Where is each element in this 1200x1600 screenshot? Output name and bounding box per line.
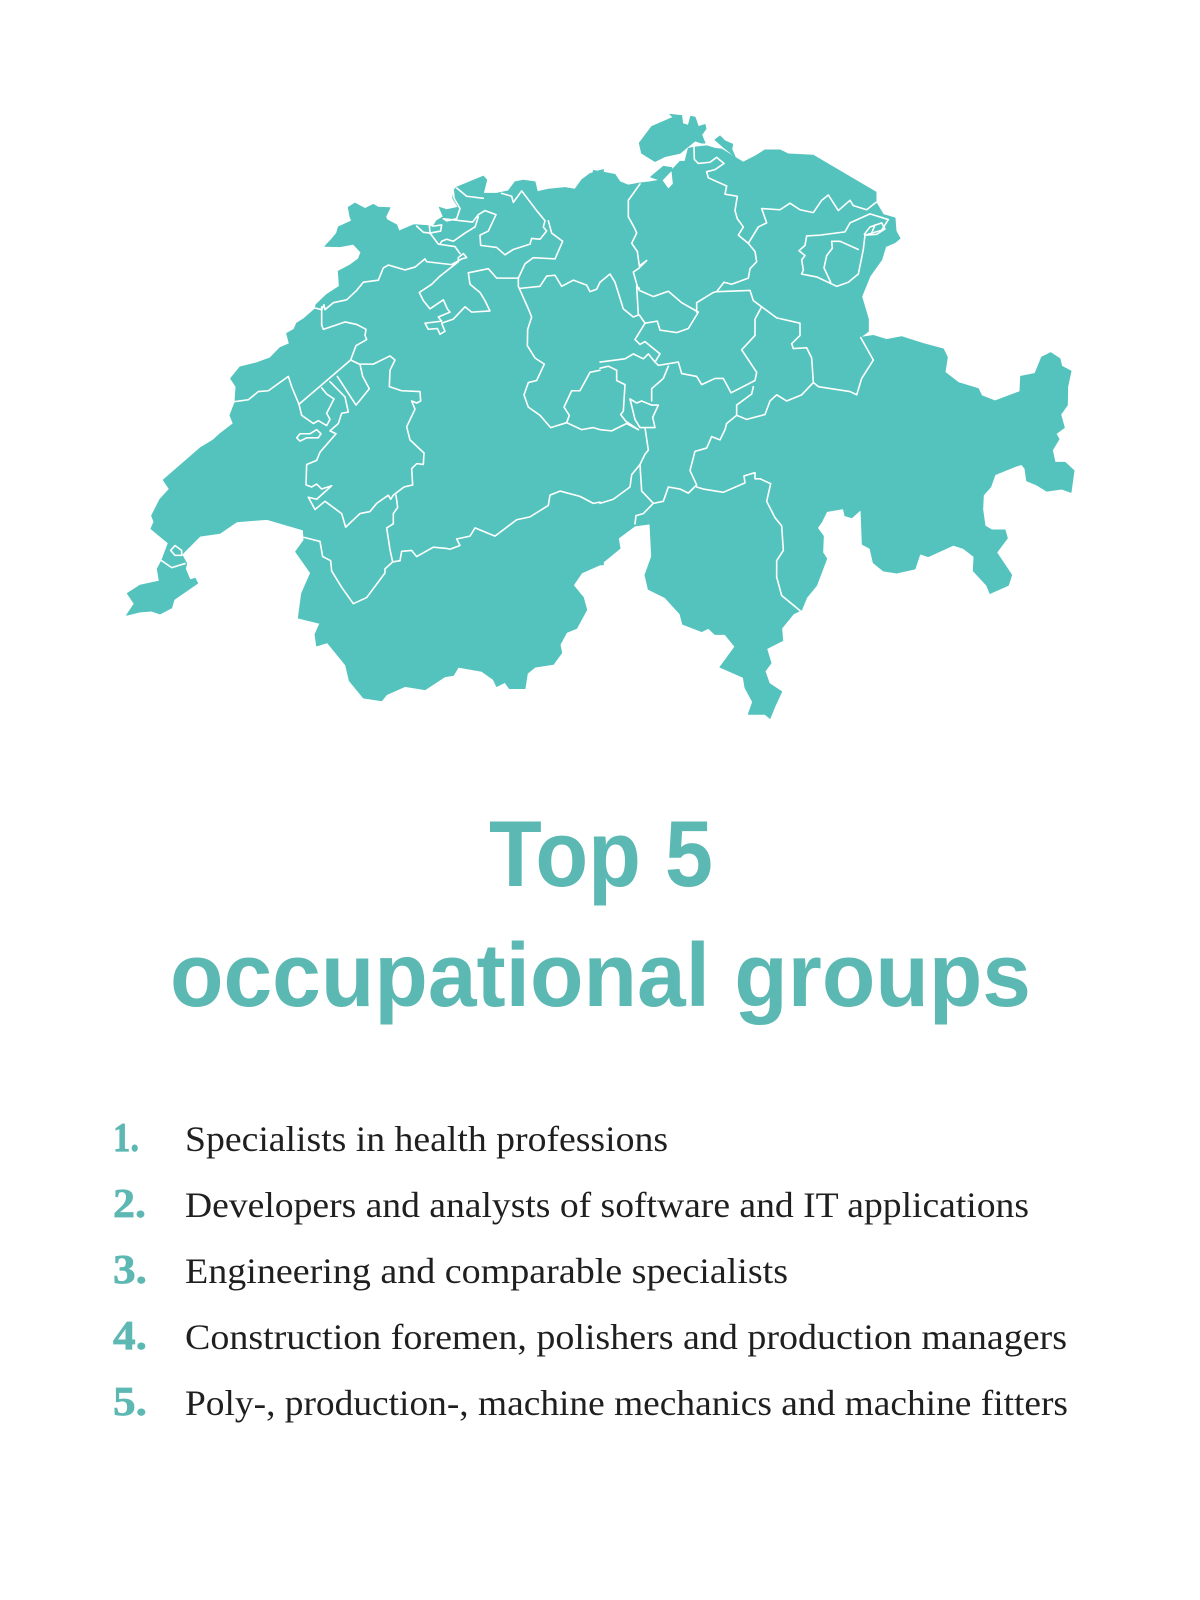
map landmass east [593, 114, 1074, 718]
Rhine exclave [715, 136, 735, 157]
Schaffhausen area [639, 114, 706, 161]
canton borders east [600, 147, 888, 611]
list item 5: 5. [113, 1378, 147, 1424]
list item 4: Construction foremen, polishers and production managers [185, 1317, 1067, 1357]
title [170, 801, 1031, 1026]
list item 5: Poly-, production-, machine mechanics and machine fitters [185, 1383, 1068, 1423]
canton borders west [162, 188, 600, 604]
map of Switzerland with cantons [127, 114, 1074, 718]
list item 1: 1. [113, 1114, 139, 1160]
list item 3: Engineering and comparable specialists [185, 1251, 788, 1291]
list item 4: 4. [113, 1312, 147, 1358]
list item 1: Specialists in health professions [185, 1119, 668, 1159]
map landmass west [127, 170, 603, 701]
title line 2: occupational groups [170, 926, 1031, 1026]
ranked list [113, 1114, 1068, 1424]
list item 2: Developers and analysts of software and IT applications [185, 1185, 1029, 1225]
list item 2: 2. [113, 1180, 146, 1226]
title line 1: Top 5 [489, 801, 713, 906]
list item 3: 3. [113, 1246, 147, 1292]
